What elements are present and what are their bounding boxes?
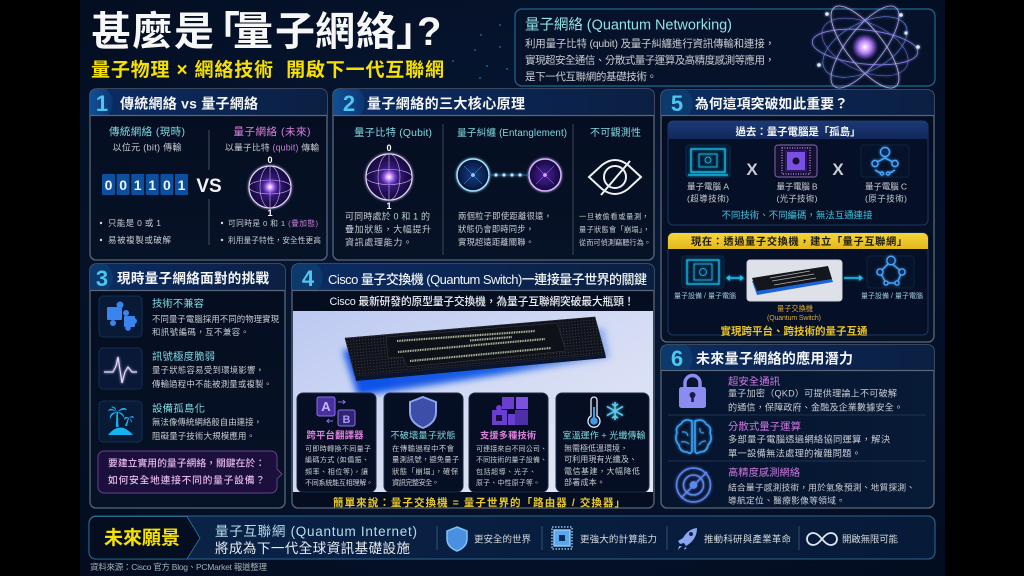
icon: quantum device right bbox=[861, 256, 923, 300]
icon: brain bbox=[676, 420, 711, 453]
panel 1: traditional vs quantum bbox=[90, 89, 327, 260]
principle: qubit: 1 bbox=[386, 201, 392, 211]
intro text: 是下一代互聯網的基礎技術。 bbox=[525, 70, 657, 83]
principle: no observation bbox=[579, 126, 651, 247]
heading 1: 傳統網絡 vs 量子網絡 bbox=[120, 96, 258, 112]
X separator: X bbox=[832, 160, 844, 179]
icon: laptop A: (超導技術) bbox=[687, 194, 729, 204]
benefit: infinite possibility bbox=[807, 533, 898, 546]
benefit: research and industry bbox=[678, 528, 791, 550]
future vision label: 未來願景 bbox=[104, 527, 180, 549]
icon: quantum device left bbox=[674, 256, 736, 300]
card: non-destructive bbox=[384, 393, 463, 492]
application: sensing bbox=[676, 466, 915, 506]
card: non-destructive: 狀態「崩塌」，確保 bbox=[392, 467, 458, 476]
card: translator bbox=[297, 393, 376, 492]
icon: A B translate: B bbox=[343, 414, 351, 426]
challenge: isolated devices bbox=[99, 401, 262, 442]
icon: quantum device left: 量子設備 / 量子電腦 bbox=[674, 291, 736, 300]
card: non-destructive: 在傳輸過程中不會 bbox=[392, 444, 455, 453]
heading 4: Cisco 量子交換機 (Quantum Switch)一連接量子世界的關鍵 bbox=[328, 272, 647, 287]
application: secure comms: 的通信，保障政府、金融及企業數據安全。 bbox=[728, 402, 903, 412]
card: non-destructive: 資訊完整安全。 bbox=[392, 478, 439, 487]
card: multi technology: 原子、中性原子等。 bbox=[476, 478, 540, 487]
card: room temperature: 無需極低溫環境， bbox=[564, 443, 628, 453]
panel 5: why it matters bbox=[661, 90, 934, 342]
bits display: 1 bbox=[134, 177, 142, 193]
footer band: future vision bbox=[89, 516, 935, 559]
card: room temperature: 可利用現有光纖及、 bbox=[564, 454, 637, 464]
column: quantum: 量子網絡 (未來) bbox=[234, 125, 310, 138]
bullet list left: 易被複製或破解 bbox=[108, 235, 171, 245]
panel 3: challenges bbox=[90, 264, 285, 508]
panel 4: cisco quantum switch bbox=[292, 264, 654, 509]
challenge: incompatible: 和訊號編碼，互不兼容。 bbox=[152, 327, 249, 337]
icon: puzzle bbox=[107, 302, 137, 331]
sub-panel: past: 過去：量子電腦是「孤島」 bbox=[736, 125, 860, 138]
card: translator: 跨平台翻譯器 bbox=[306, 430, 364, 440]
card: multi technology: 可連接來自不同公司、 bbox=[476, 444, 547, 453]
image: quantum switch thumbnail bbox=[747, 260, 842, 301]
heading 6: 未來量子網絡的應用潛力 bbox=[696, 350, 853, 366]
card: room temperature: 電信基建，大幅降低 bbox=[564, 466, 640, 476]
switch label: 量子交換機 bbox=[777, 304, 813, 313]
icon: network C: 量子電腦 C bbox=[865, 182, 907, 192]
card: multi technology: 包括超導、光子、 bbox=[476, 467, 536, 476]
principle: qubit: 0 bbox=[386, 143, 392, 153]
principle: no observation: 從而可偵測竊聽行為。 bbox=[579, 238, 651, 247]
bits display: 1 bbox=[148, 177, 156, 193]
card: multi technology: 支援多種技術 bbox=[480, 430, 536, 440]
icon: laptop A: 量子電腦 A bbox=[687, 182, 729, 192]
application: distributed computing: 分散式量子運算 bbox=[728, 420, 801, 433]
panel 6: applications bbox=[661, 345, 934, 508]
bullet list left: 只能是 0 或 1 bbox=[108, 218, 161, 228]
principle: qubit: 量子比特 (Qubit) bbox=[354, 126, 432, 139]
X separator: X bbox=[746, 160, 758, 179]
application: sensing: 高精度感測網絡 bbox=[728, 466, 800, 479]
benefit: research and industry: 推動科研與產業革命 bbox=[704, 534, 791, 546]
icon: qubit sphere bbox=[249, 166, 291, 208]
icon: crossed eye bbox=[589, 160, 641, 195]
application: secure comms: 超安全通訊 bbox=[728, 375, 781, 388]
column: traditional bbox=[100, 125, 188, 245]
VS divider bbox=[196, 130, 222, 245]
challenge: fragile signal: 訊號極度脆弱 bbox=[152, 350, 215, 363]
icon: network C: (原子技術) bbox=[865, 194, 907, 204]
heading 2: 量子網絡的三大核心原理 bbox=[367, 96, 525, 112]
future vision text bbox=[215, 524, 417, 556]
icon: puzzle purple bbox=[492, 397, 528, 425]
bits display: 1 bbox=[178, 177, 186, 193]
application: secure comms: 量子加密（QKD）可提供理論上不可破解 bbox=[728, 388, 897, 398]
source note: 資料來源：Cisco 官方 Blog、PCMarket 報道整理 bbox=[90, 562, 267, 572]
title: 甚麼是「量子網絡」? bbox=[91, 10, 441, 54]
icon: quantum device right: 量子設備 / 量子電腦 bbox=[861, 291, 923, 300]
column: traditional: 以位元 (bit) 傳輸 bbox=[112, 142, 182, 152]
icon: A B translate: A bbox=[321, 399, 331, 414]
number 6: 6 bbox=[671, 346, 683, 371]
intro text: 利用量子比特 (qubit) 及量子糾纏進行資訊傳輸和連接， bbox=[525, 37, 775, 50]
icon: chip B: (光子技術) bbox=[776, 194, 818, 204]
bits display: 0 bbox=[163, 177, 171, 193]
icon: radar bbox=[676, 468, 710, 502]
intro heading: 量子網絡 (Quantum Networking) bbox=[525, 16, 732, 34]
panel: intro definition bbox=[515, 0, 935, 97]
subheading 4: Cisco 最新研發的原型量子交換機，為量子互聯網突破最大瓶頸！ bbox=[330, 294, 634, 308]
switch label: (Quantum Switch) bbox=[767, 315, 821, 322]
number 4: 4 bbox=[302, 266, 315, 291]
icon: entangled particles bbox=[457, 159, 561, 191]
principle: entanglement: 兩個粒子即使距離很遠， bbox=[458, 211, 552, 221]
column: quantum: 0 bbox=[267, 155, 273, 165]
card: room temperature bbox=[556, 393, 649, 492]
principle: entanglement: 實現超遠距離關聯。 bbox=[458, 237, 534, 247]
intro text: 實現超安全通信、分散式量子運算及高精度感測等應用， bbox=[525, 54, 775, 66]
callout bbox=[98, 451, 282, 493]
future vision text: 量子互聯網 (Quantum Internet) bbox=[215, 524, 417, 539]
challenge: fragile signal: 量子狀態容易受到環境影響， bbox=[152, 365, 264, 375]
application: distributed computing: 單一設備無法處理的複雜問題。 bbox=[728, 448, 861, 458]
column: quantum: 1 bbox=[267, 208, 273, 218]
challenge: fragile signal bbox=[99, 348, 272, 389]
application: distributed computing: 多部量子電腦透過網絡協同運算，解決 bbox=[728, 434, 890, 444]
icon: shield bbox=[410, 397, 436, 428]
icon: thermometer bbox=[588, 397, 600, 427]
icon: island bbox=[108, 407, 134, 435]
challenge: incompatible: 技術不兼容 bbox=[152, 297, 204, 310]
number 5: 5 bbox=[671, 91, 683, 116]
future vision text: 將成為下一代全球資訊基礎設施 bbox=[215, 540, 410, 556]
icon: chip B: 量子電腦 B bbox=[776, 182, 818, 192]
bits display: 0 bbox=[105, 177, 113, 193]
card: multi technology: 不同技術的量子設備、 bbox=[476, 455, 547, 464]
principle: entanglement: 量子糾纏 (Entanglement) bbox=[457, 126, 567, 139]
bullet list right: 可同時是 0 和 1 (疊加態) bbox=[228, 218, 318, 228]
challenge: incompatible: 不同量子電腦採用不同的物理實現 bbox=[152, 314, 280, 324]
benefit: safer world bbox=[447, 527, 531, 551]
panel 2: core principles bbox=[333, 89, 654, 260]
benefit: safer world: 更安全的世界 bbox=[474, 534, 531, 546]
benefit: infinite possibility: 開啟無限可能 bbox=[842, 534, 898, 546]
card: translator: 可即時轉換不同量子 bbox=[305, 444, 371, 453]
principle: entanglement: 狀態仍會即時同步， bbox=[458, 224, 534, 234]
card: non-destructive: 量測訊號，避免量子 bbox=[392, 455, 459, 464]
bullet list right bbox=[221, 218, 321, 245]
principle: entanglement bbox=[457, 126, 567, 247]
principle: qubit: 疊加狀態，大幅提升 bbox=[345, 224, 431, 234]
principle: no observation: 不可觀測性 bbox=[590, 126, 641, 139]
benefit: computing power: 更強大的計算能力 bbox=[580, 534, 657, 546]
icon: A B translate bbox=[317, 397, 355, 426]
callout: 要建立實用的量子網絡，關鍵在於： bbox=[108, 456, 265, 470]
card: translator: 不同系統能互相理解。 bbox=[305, 478, 373, 487]
benefit: computing power bbox=[552, 527, 657, 549]
VS divider: VS bbox=[196, 176, 222, 197]
principle: qubit: 可同時處於 0 和 1 的 bbox=[345, 210, 430, 222]
arrow: double bbox=[726, 275, 744, 281]
image: quantum switch chip bbox=[293, 311, 653, 492]
callout: 如何安全地連接不同的量子設備？ bbox=[108, 474, 265, 486]
challenge: isolated devices: 設備孤島化 bbox=[152, 402, 205, 415]
icon: laptop A bbox=[686, 145, 730, 204]
card: translator: 編碼方式 (如偏振、 bbox=[305, 455, 369, 464]
sub-panel: past bbox=[668, 121, 928, 225]
sub-panel: now bbox=[668, 233, 928, 338]
intro text bbox=[525, 37, 775, 83]
number 2: 2 bbox=[343, 91, 355, 116]
application: sensing: 結合量子感測技術，用於氣象預測、地質探測、 bbox=[728, 482, 915, 492]
now caption: 實現跨平台、跨技術的量子互通 bbox=[720, 324, 868, 338]
column: quantum bbox=[221, 125, 321, 245]
bits display: 0 bbox=[119, 177, 127, 193]
principle: no observation: 一旦被偷看或量測， bbox=[579, 212, 649, 221]
icon: atom bbox=[811, 0, 920, 97]
icon: lock bbox=[679, 376, 706, 408]
application: distributed computing bbox=[676, 420, 890, 458]
application: sensing: 導航定位、醫療影像等領域。 bbox=[728, 494, 845, 506]
arrow: right bbox=[844, 275, 863, 281]
icon: pulse bbox=[104, 357, 137, 383]
challenge: isolated devices: 無法像傳統網絡般自由連接， bbox=[152, 417, 262, 427]
number 1: 1 bbox=[96, 91, 108, 116]
principle: qubit bbox=[345, 126, 432, 248]
bits display bbox=[102, 174, 188, 195]
bullet list left bbox=[100, 218, 171, 245]
card: multi technology bbox=[469, 393, 548, 492]
card: room temperature: 部署成本。 bbox=[564, 477, 605, 487]
icon: chip B bbox=[775, 145, 818, 204]
number 3: 3 bbox=[96, 266, 108, 291]
sub-panel: now: 現在：透過量子交換機，建立「量子互聯網」 bbox=[691, 235, 907, 248]
card: room temperature: 室溫運作 + 光纖傳輸 bbox=[562, 430, 646, 440]
column: traditional: 傳統網絡 (現時) bbox=[109, 125, 185, 138]
bullet list right: 利用量子特性，安全性更高 bbox=[228, 235, 321, 245]
subtitle: 量子物理 × 網絡技術 開啟下一代互聯網 bbox=[91, 59, 444, 81]
heading 5: 為何這項突破如此重要？ bbox=[695, 96, 848, 112]
past caption: 不同技術、不同編碼，無法互通連接 bbox=[722, 210, 873, 222]
card: non-destructive: 不破壞量子狀態 bbox=[390, 430, 456, 440]
heading 3: 現時量子網絡面對的挑戰 bbox=[117, 270, 270, 286]
card: translator: 頻率、相位等)，讓 bbox=[305, 467, 368, 476]
summary strip: 簡單來說：量子交換機 = 量子世界的「路由器 / 交換器」 bbox=[333, 496, 625, 509]
principle: qubit: 資訊處理能力。 bbox=[345, 236, 412, 248]
icon: snowflake bbox=[607, 402, 623, 420]
application: secure comms bbox=[679, 375, 903, 412]
challenge: fragile signal: 傳輸過程中不能被測量或複製。 bbox=[152, 379, 272, 389]
principle: no observation: 量子狀態會「崩塌」， bbox=[579, 225, 650, 234]
switch label bbox=[767, 304, 821, 322]
icon: qubit sphere bbox=[366, 154, 412, 200]
icon: network C bbox=[861, 145, 909, 204]
column: quantum: 以量子比特 (qubit) 傳輸 bbox=[225, 142, 319, 152]
challenge: incompatible bbox=[99, 296, 280, 337]
challenge: isolated devices: 阻礙量子技術大規模應用。 bbox=[152, 431, 255, 441]
